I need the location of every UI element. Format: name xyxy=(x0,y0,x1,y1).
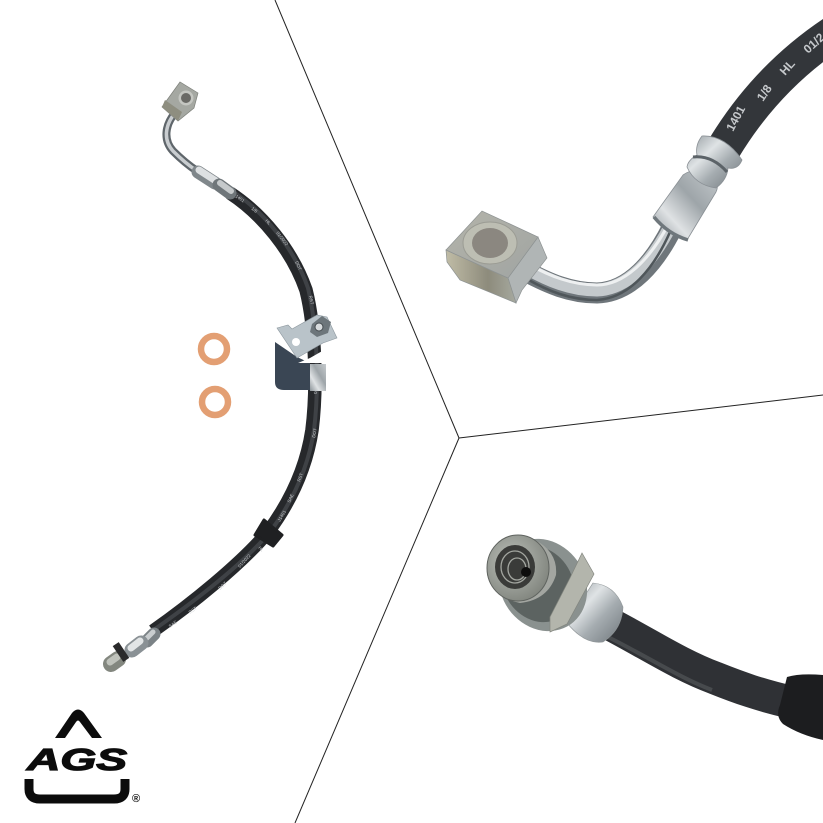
nose xyxy=(487,536,556,603)
hose markings: RST xyxy=(308,295,315,305)
hose markings: J1401 xyxy=(277,509,287,522)
crimp xyxy=(567,583,623,642)
hose markings: 01/2022 xyxy=(313,377,319,394)
rubber grommet xyxy=(255,520,282,546)
hose markings: 1401 xyxy=(234,194,246,204)
upper steel tube xyxy=(166,113,197,171)
hose markings: HL xyxy=(264,218,272,226)
hose body xyxy=(153,191,317,631)
mounting bracket xyxy=(275,315,337,391)
banjo block xyxy=(508,237,547,303)
copper washers xyxy=(201,336,228,415)
detail: threaded end close-up xyxy=(481,522,823,740)
end face xyxy=(487,535,549,601)
logo tray xyxy=(29,779,125,799)
hose markings: SAE xyxy=(286,493,295,503)
logo chevron xyxy=(55,710,102,738)
hose markings: SAE xyxy=(168,620,178,629)
hose markings: 01/2022 xyxy=(275,231,289,247)
hose markings xyxy=(723,30,823,133)
ferrule xyxy=(653,170,717,240)
detail: banjo fitting close-up xyxy=(446,30,823,303)
hose markings: DOT xyxy=(311,428,318,438)
hose xyxy=(724,32,823,148)
hose markings: RST xyxy=(188,605,198,615)
hex nut xyxy=(550,553,594,632)
lower fitting xyxy=(110,632,154,664)
hose markings: RST xyxy=(296,472,304,482)
hose markings: 01/2022 xyxy=(237,553,252,569)
rubber grommet xyxy=(778,674,823,740)
hose markings: DOT xyxy=(217,581,228,591)
hose markings: HL xyxy=(777,57,798,78)
hose xyxy=(610,624,790,702)
logo wordmark: AGS xyxy=(26,742,127,777)
full brake hose assembly xyxy=(110,82,337,664)
hose markings: 1/8 xyxy=(250,206,259,214)
hose markings: DOT xyxy=(294,260,303,271)
registered mark: ® xyxy=(132,793,140,805)
hose markings: 1401 xyxy=(723,103,748,133)
upper ferrule and crimp xyxy=(198,170,231,193)
hose markings: 1/8 xyxy=(754,82,775,104)
upper banjo block xyxy=(162,82,198,121)
flange xyxy=(481,522,605,648)
hose markings xyxy=(168,194,319,629)
divider lines xyxy=(275,0,823,823)
hose markings: HL xyxy=(257,545,265,553)
steel tube xyxy=(527,225,672,300)
AGS logo xyxy=(26,710,140,805)
crimp xyxy=(687,136,742,188)
